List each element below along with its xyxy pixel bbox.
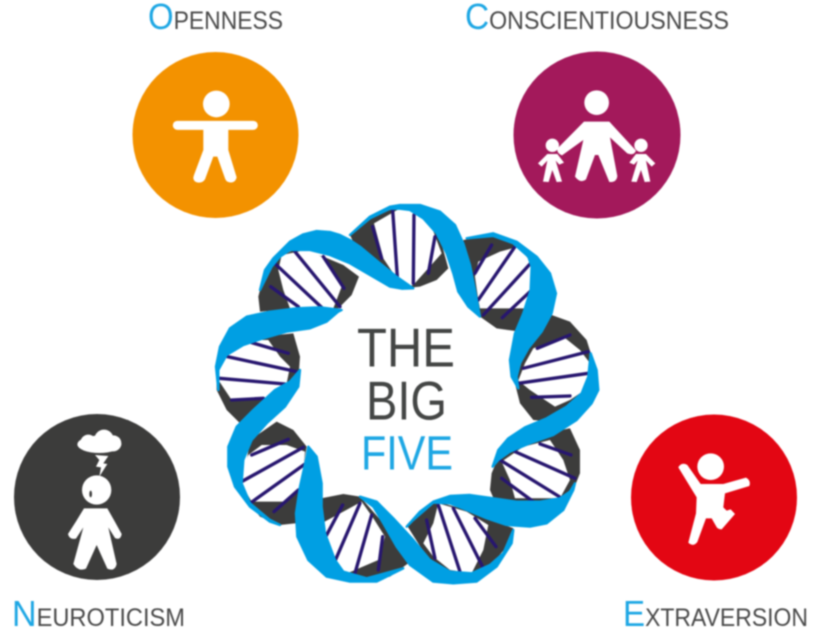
badge: Neuroticism dark circle with storm-cloud figure [14, 414, 180, 580]
icon: figure under storm cloud [68, 430, 122, 570]
strand lobe: lower right [490, 428, 580, 502]
strand lobe: upper left [258, 250, 359, 312]
badge: Conscientiousness magenta circle with adult and children [514, 52, 680, 218]
title: THE BIG FIVE [357, 316, 455, 480]
strand lobe: upper right [463, 235, 533, 332]
strand lobe: top [350, 207, 448, 288]
title: THE BIG FIVE: FIVE [361, 427, 453, 480]
title: THE BIG FIVE: BIG [366, 369, 447, 431]
badge: Extraversion red circle with jumping figure [631, 414, 797, 580]
strand lobe: bottom left [322, 494, 408, 582]
strand lobe: right [515, 315, 597, 423]
strand lobe: bottom right [407, 502, 513, 575]
badge: Openness orange circle with open-armed figure [132, 52, 298, 218]
strand lobe: left [217, 333, 300, 423]
icon: adult holding two children [538, 90, 655, 182]
blue helix ribbon [216, 205, 598, 583]
icon: jumping figure [678, 453, 750, 545]
diagram: DNA double-helix ring [216, 205, 598, 583]
title: THE BIG FIVE: THE [357, 316, 455, 378]
icon: open-armed figure [177, 91, 253, 183]
strand lobe: lower left [242, 422, 307, 525]
